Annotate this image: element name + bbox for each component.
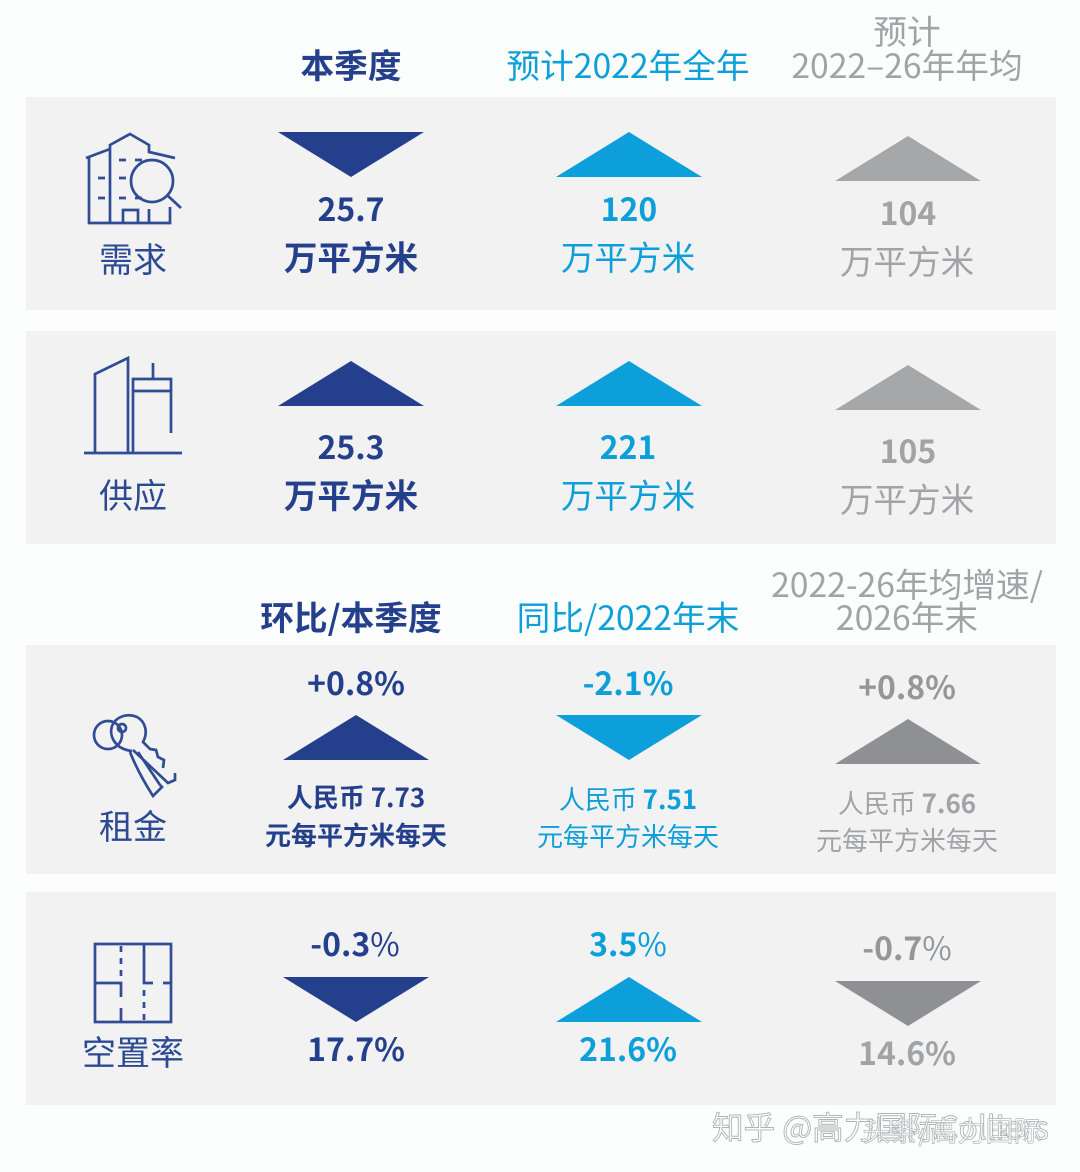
value: +0.8% gray: +0.8% [858, 663, 956, 709]
heading: 2022-26 annual average: 预计 [873, 5, 941, 54]
arrow: up gray [835, 719, 981, 764]
price gray: 人民币 7.66 [838, 784, 976, 821]
label: demand: 需求 [99, 233, 167, 282]
unit gray: 万平方米 [840, 473, 974, 522]
watermark: 知乎 @高力国际Colliers [712, 1103, 1049, 1149]
value: 25.3: 25.3 [317, 423, 385, 469]
unit navy: 万平方米 [284, 469, 418, 518]
heading: this quarter: 本季度 [300, 39, 402, 88]
panel: vacancy [26, 892, 1056, 1105]
heading: 2022 full-year forecast: 预计2022年全年 [506, 39, 750, 88]
unit navy: 万平方米 [284, 231, 418, 280]
arrow: down navy [283, 977, 429, 1022]
value: -2.1%: -2.1% [583, 659, 673, 705]
arrow: up blue [556, 361, 702, 406]
heading: 2022-26 annual average: 2022–26年年均 [791, 39, 1023, 88]
value: 221: 221 [600, 423, 656, 469]
value: 104: 104 [880, 189, 936, 235]
panel: rent [26, 645, 1056, 874]
arrow: up gray [835, 365, 981, 410]
value: 120: 120 [601, 185, 657, 231]
label: vacancy: 空置率 [82, 1026, 184, 1075]
icon: towers [84, 358, 182, 453]
heading: 2022-26 growth / end 2026: 2022-26年均增速/ [771, 558, 1043, 607]
heading: 2022-26 growth / end 2026: 2026年末 [836, 591, 978, 640]
icon: building with magnifier [86, 134, 181, 223]
icon: keys [94, 715, 175, 796]
value: 3.5%: 3.5% [589, 920, 667, 966]
unit blue: 万平方米 [561, 231, 695, 280]
value: -0.3%: -0.3% [310, 920, 400, 966]
price blue: 人民币 7.51 [559, 780, 697, 817]
watermark: 头条/高力国际 [863, 1110, 1041, 1150]
arrow: up navy [283, 715, 429, 760]
label: rent: 租金 [99, 800, 167, 849]
arrow: down blue [556, 715, 702, 760]
value: 17.7%: 17.7% [307, 1025, 405, 1071]
unit gray: 万平方米 [840, 235, 974, 284]
arrow: down navy [278, 132, 424, 177]
per-unit navy: 元每平方米每天 [265, 816, 447, 853]
arrow: up blue [556, 977, 702, 1022]
icon: floor plan [95, 944, 171, 1022]
arrow: up blue [556, 132, 702, 177]
arrow: up navy [278, 361, 424, 406]
heading: YoY / end 2022: 同比/2022年末 [517, 591, 739, 640]
panel: demand [26, 97, 1056, 310]
heading: QoQ / this quarter: 环比/本季度 [260, 591, 442, 640]
value: +0.8%: +0.8% [307, 659, 405, 705]
price navy: 人民币 7.73 [287, 778, 425, 815]
value: 105: 105 [880, 427, 936, 473]
value: 21.6%: 21.6% [579, 1025, 677, 1071]
arrow: up gray [835, 136, 981, 181]
header row 1 [300, 5, 1023, 88]
per-unit blue: 元每平方米每天 [537, 817, 719, 854]
value: 25.7: 25.7 [317, 185, 385, 231]
unit blue: 万平方米 [561, 469, 695, 518]
header row 2 [260, 558, 1043, 640]
panel: supply [26, 331, 1056, 544]
per-unit gray: 元每平方米每天 [816, 821, 998, 858]
value: 14.6% gray: 14.6% [858, 1029, 956, 1075]
label: supply: 供应 [99, 469, 167, 518]
value: -0.7% gray: -0.7% [862, 924, 952, 970]
arrow: down gray [835, 981, 981, 1026]
